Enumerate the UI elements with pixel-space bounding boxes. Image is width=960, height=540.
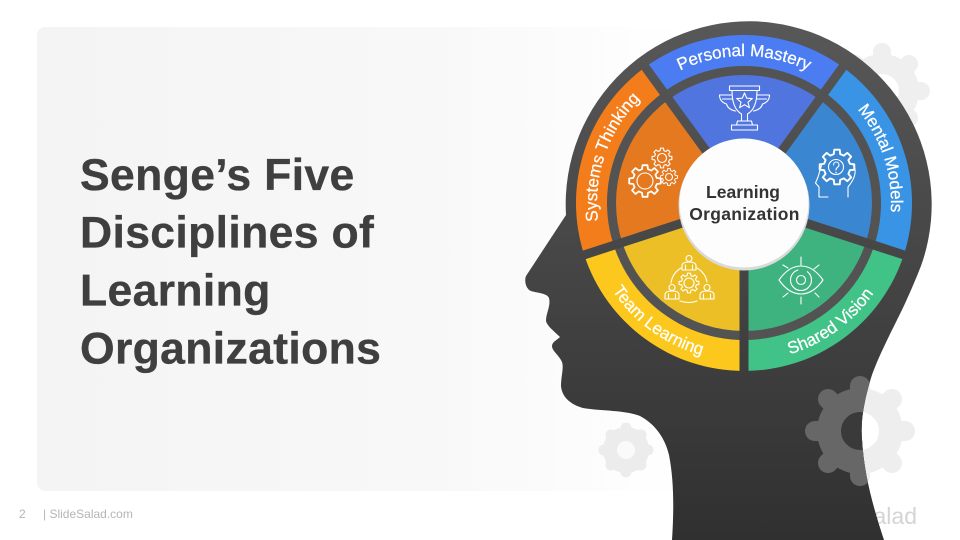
title: Organizations (80, 324, 381, 374)
icon: team around gear (665, 256, 714, 302)
outer ring: Shared Vision (744, 203, 904, 371)
icon: eye (779, 257, 823, 304)
label: Shared Vision: Shared Vision (788, 290, 874, 354)
footer page number and site: | SlideSalad.com (43, 507, 133, 521)
wheel (576, 35, 912, 375)
center hub (678, 138, 810, 270)
gear: lower left background (604, 428, 648, 472)
title: Senge’s Five (80, 151, 355, 200)
ring divider (607, 66, 881, 340)
head silhouette (525, 21, 932, 540)
icon: gears (629, 148, 677, 197)
inner wedge: Systems Thinking (616, 99, 744, 243)
inner wedge: Personal Mastery (669, 75, 819, 203)
label: Mental Models: Mental Models (858, 103, 904, 212)
label: Team Learning: Team Learning (614, 284, 704, 358)
title: Learning (80, 266, 271, 316)
gear: top right background (843, 52, 921, 130)
outer ring: Personal Mastery (645, 35, 843, 203)
icon: head with gear and question mark (816, 150, 855, 197)
title: Disciplines of (80, 208, 374, 258)
gear: lower right on head (805, 376, 870, 486)
inner wedge: Team Learning (622, 203, 744, 331)
icon: trophy (720, 86, 770, 130)
hub text: Organization (689, 204, 800, 224)
watermark: SlideSalad (807, 503, 917, 529)
background panel (37, 27, 697, 491)
footer page number and site: 2 (19, 507, 26, 521)
inner wedge: Shared Vision (744, 203, 866, 331)
inner wedge: Mental Models (744, 99, 872, 243)
wedge separators (580, 64, 908, 375)
label: Systems Thinking: Systems Thinking (586, 93, 641, 221)
label: Personal Mastery: Personal Mastery (676, 44, 812, 72)
outer ring: Systems Thinking (576, 67, 744, 255)
hub text: Learning (706, 182, 780, 202)
gear: lower right on white (815, 386, 905, 476)
outer ring: Mental Models (744, 67, 912, 255)
outer ring: Team Learning (584, 203, 744, 371)
